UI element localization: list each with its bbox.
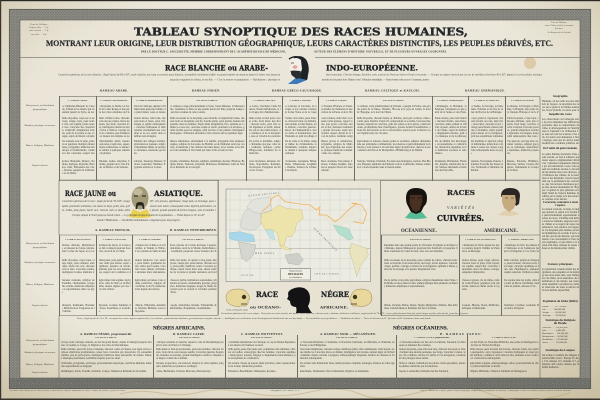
column: melanesian: UNE SEULE FAMILLE. [336, 337, 358, 339]
intro text right: marché sur les points hors l'Indus et ses Civilisation immédiate. — Nous livrons cette race en 3 rameaux, savoir : [322, 78, 430, 82]
column: arab 1: Arabes, Bédouins, Maures, Numides, Kabyles, Abyssins, Berbères, Juifs, Éthiopiens des côtes, Syriens, peuples de la Barbarie et de Nubie. [62, 160, 94, 175]
panel: table of the yellow race [24, 234, 218, 316]
branch labels: RAMEAU SYRIEN. [192, 88, 220, 92]
foot text: Sud de l'Hindoustan. — Sensibilité multitudinaire, rangement pour tout progrès. [97, 218, 180, 222]
column: melanesian: Australiens, Tasmaniens, Néo-Calédoniens, Négritos et Andamans. [300, 370, 369, 372]
map labels: MER INDES [255, 252, 275, 255]
column: papou 2: Fidjiens, Hébridais, Vitiens et habitants de Madagascar. [470, 370, 527, 372]
column: mongol 3: Chinois, Thibétains, Annamites, Siamois, Birmans, Laos et Pégouans. [134, 304, 166, 312]
skull right [349, 289, 372, 307]
column: american 2: Péruviens, Caraïbes, Guaranis, Botocudos, Patagons. [504, 304, 539, 310]
column: arab 2: Nubiens, Gallas, Abyssins, Somalis, peuples de la côte d'Ajan, de Berber et du Sennaar. [98, 160, 130, 169]
column: mongol 3: 3° FAMILLE CHINOISE. [139, 239, 161, 241]
column: oceanian: Vie de pêche et de petite agriculture, religion musulmane dans l'Inde, fétichisme et tabou dans les îles, anthropophagie dans plusieurs archipels; médecine empirique et superstitieuse. [384, 279, 458, 288]
heading: negres africains: NÉGRES AFRICAINS. [153, 324, 206, 332]
column: mongol 3 [132, 235, 167, 316]
heading: asiatique: ASIATIQUE. [153, 189, 203, 198]
title block [46, 26, 553, 54]
column: germanic 1: Vie de famille très développée, protestantisme et catholicisme, instruction répandue, écoles médicales savantes et renommées. [434, 140, 466, 155]
sidebar: unity: De l'unité du genre humain. [543, 146, 578, 150]
heading: negres oceaniens: NÉGRES OCÉANIENS. [393, 324, 449, 332]
map labels: ANTARCTIQUE [314, 273, 340, 276]
branch labels: B. RAMEAU CAFRE. [173, 332, 205, 336]
column: cafre: Pasteurs et guerriers, circoncision, absence de culte régulier, jongleurs, médecine par plantes et sortilèges. [156, 362, 224, 368]
column: arab 2 [96, 96, 131, 181]
labels: OCÉANIENNE. [401, 228, 438, 233]
panel: race blanche heading [20, 56, 580, 92]
foot text [72, 214, 205, 222]
branch labels: RAMEAU GERMANIQUE. [465, 88, 505, 92]
author line left: PAR LE DOCTEUR C. SAUCEROTTE, MEMBRE CORRESPONDANT DE L'ACADÉMIE ROYALE DE MÉDECINE, [141, 50, 286, 54]
sidebar: religions table: Statistique des Religions [545, 318, 576, 322]
column: cafre: Cafres, Béchuanas, Zoulous, Macouas, Monomotapa. [156, 370, 211, 372]
heading: races: RACES [447, 189, 475, 197]
column: hyperborean: Chasse et pêche, habitations souterraines, vêtements de peaux, chamanisme grossier, jongleries, médecine magique, usage de l'huile de poisson pour se nourrir et s'éclairer pendant l'hiver. [170, 279, 216, 294]
portrait: american [498, 188, 520, 216]
column: american 1 [459, 235, 501, 316]
column: american 1: L'Amérique du Nord, depuis les terres polaires jusqu'à l'isthme de Panama et au Mexique. [462, 244, 500, 252]
intro text right: bien tranchant, Chevron frange, flexibles, soin, surtout du Nord au Sud-est Fond et en pente. — Occupe un espace mesuré par un arc de méridien d'environ 40 à 60°, depuis le cercle polaire arctique [326, 74, 543, 76]
column: papou 2 [467, 335, 540, 378]
column: celtic: Ce rameau, venu primitivement de l'Orient, a peuplé la France, une grande partie de la Suisse, l'Irlande, l'Écosse et le pays de Galles, le nord de l'Espagne, et le nord de l'Italie. [356, 104, 430, 114]
panel: table of the copper races [381, 234, 540, 316]
column: hottentot: Taille petite, peau d'un jaune sale, pommettes très saillantes, cheveux en touffes, stéatopygie chez les femmes. Caractère apathique, malpropreté, paresse, langage à claquements extraordinaires, peu susceptibles de civilisation. [228, 348, 296, 360]
column: melanesian [297, 335, 396, 378]
column: germanic 2: Vie maritime et agricole, religion luthérienne, instruction commune à toutes les classes, longévité remarquable dans ces pays. [470, 140, 503, 155]
column: negre: Fétichisme, polygamie, esclavage, gouvernement despotique, sacrifices humains, médecine superstitieuse et magique. [60, 362, 152, 368]
column: negre [60, 337, 152, 372]
column: germanic 1 [432, 96, 468, 181]
column: syrian: Taille au-dessus de la moyenne, peau blanche ou légèrement brune, cheveux noirs et abondants, nez fin, bouche petite, yeux grands, beauté remarquable chez les femmes. Esprit délié, imagination vive, aptitude au commerce et aux arts, caractère souple et adroit, penchant à la mollesse, grande facilité pour les langues, goût du luxe et des plaisirs, intelligence développée, civilisation ancienne et très avancée dès les premiers âges. [170, 117, 244, 135]
column: mongol 2 [96, 235, 132, 316]
corner note: left: Papier vélin . . . 2 fr. [29, 26, 49, 29]
column: syrian: Syriens, Chaldéens, Persans, Afghans, Arméniens, Kurdes, Hindous, Bengalis, Parsis, Tamouls, Cingalais, Malabares, Bohémiens, Juifs de l'Orient et habitants de la Géorgie. [170, 160, 244, 169]
row labels: Haut pouvoir, et distribution géographique. [26, 104, 54, 111]
column: germanic 2: La Suède, la Norvège, le Danemark, l'Islande et les îles de la mer du Nord et de la Baltique. [470, 104, 503, 114]
column: arab 2: Christianisme altéré, mœurs pastorales et agricoles, superstitions nombreuses, la médecine réduite à quelques remèdes de plantes. [98, 140, 130, 155]
panel: right sidebar notes: Le genre humain descend-il d'une seule souche, ou faut-il admettre plusieurs espèces originairement distinctes ? Question longuement débattue par les naturalistes. Ceux-ci invoquent les traditions sacrées, la fécondité des unions entre races diverses, et l'influence des climats, de la nourriture et des habitudes; ceux-là répondent par la permanence des caractères, que l'on retrouve identiques sur les plus anciens monuments de l'Égypte. L'opinion la plus générale reconnaît l'unité de l'espèce humaine, modifiée par le temps et le lieu selon les contrées et les siècles. [542, 153, 579, 201]
column: syrian [167, 96, 246, 181]
column: american 2: Vie errante dans les forêts, culte du soleil au Pérou, fétichisme, médecine de plantes, adresse à l'arc. [504, 279, 539, 288]
column: american 1: Iroquois, Hurons, Sioux, Mohicans, Aztèques et Mexicains. [462, 304, 500, 310]
column: american 1: Chasse et guerre, vie de tribus, culte du Grand Esprit, jongleurs pour médecins, danses et chants sacrés à la guerre. [462, 279, 500, 291]
column: greco 3: 3° FAMILLE TURQUE. [326, 100, 347, 102]
continents [229, 197, 368, 277]
column: greco 1: Vie active et maritime, religion chrétienne grecque, culte des traditions antiques, patrie d'Hippocrate, fondateur de la médecine. [248, 140, 280, 155]
column: germanic 3: Russes, Polonais, Bohêmes, Moraves, Serbes, Croates, Bulgares, Lithuaniens et Cosaques du Don. [507, 160, 538, 172]
column: papou 2: Les îles Fidji, les Nouvelles-Hébrides, une partie de Madagascar et les îles de l'Océan Pacifique. [470, 341, 538, 347]
intro text right [322, 74, 543, 82]
column: papou 1: Pêche et culture, habitations sur pilotis, idoles grossières, parure de plumes, médecine par incantations. [398, 362, 466, 368]
branch labels: C. RAMEAU HOTTENTOT. [241, 332, 283, 336]
column: hottentot [225, 335, 297, 378]
skull caption: Crâne de Malgache adulte [226, 308, 248, 312]
row labels: Mœurs, Religion, Médecine. [26, 144, 54, 147]
row labels: Manifest. physiques et moraux. [24, 261, 56, 264]
portrait: yellow race [129, 186, 151, 218]
sidebar: languages: Statistique des Langues. [546, 348, 575, 352]
subtitle: MONTRANT LEUR ORIGINE, LEUR DISTRIBUTION GÉOGRAPHIQUE, LEURS CARACTÈRES DISTINCTIFS, LES PEUPLES DÉRIVÉS, ETC. [46, 38, 553, 48]
row labels [24, 104, 56, 167]
panel: race jaune [58, 180, 218, 235]
column: germanic 2: Suédois, Norvégiens, Danois, Islandais, Ecossais des basses terres, Normands et habitants du Jutland. [470, 160, 503, 172]
row labels: Haut pouvoir, et distribution géographique. [26, 242, 54, 249]
column: mongol 1: Pasteurs nomades, religion de Bouddha, chamanisme, polygamie tolérée, médecine empirique et superstitieuse dans ces pays. [62, 279, 94, 294]
column: germanic 3: 3° FAMILLE SLAVONNE. [511, 100, 534, 102]
main title: TABLEAU SYNOPTIQUE DES RACES HUMAINES, [134, 26, 468, 38]
column: melanesian: Peau noire fuligineuse, cheveux crépus, membres grêles, tête volumineuse, front fuyant, stature médiocre. Caractère féroce et défiant, intelligence très bornée, dernier degré de l'échelle humaine d'après certains voyageurs, anthropophagie fréquente, instinct de chasseur et d'imitation remarquable. [300, 348, 394, 360]
column: cafre: L'Afrique orientale et australe, depuis la côte de Mozambique jusqu'à la terre de Natal et à l'Orange. [156, 341, 224, 347]
column: oceanian: Répandue dans une grande partie de l'Océanie, Polynésie et Archipel de Malaisie, depuis Madagascar jusqu'aux îles Sandwich et jusqu'aux limites orientales de la mer du Sud, cette race est maritime. [384, 244, 458, 252]
panel: right sidebar notes: La station verticale, la main, le langage articulé, la raison et la faculté de perfectionnement appartiennent à toutes les races. L'homme seul habite toutes les latitudes, supporte tous les climats et se nourrit de toutes les substances. Son enfance est longue, sa vie moyenne plus étendue qu'aucun mammifère de sa taille; il est le seul être qui ait une histoire, qui transmette à ses descendants le fruit de son expérience, et qui s'élève à la notion d'un Dieu créateur de toutes choses et du monde entier visible. [542, 208, 579, 250]
row labels [24, 339, 56, 374]
table rules [381, 234, 540, 316]
column: oceanian [381, 235, 459, 316]
column: syrian: Ce rameau occupe principalement la Syrie, l'Asie Mineure, la Mésopotamie, l'Arménie, la Perse et une grande partie de l'Inde, jusqu'au Gange et aux îles voisines de cette contrée. [170, 104, 244, 114]
branch labels: A. RAMEAU MONGOL. [95, 228, 131, 232]
orange boundary [262, 195, 367, 223]
column: arab 1 [59, 96, 96, 181]
portrait: oceanian [405, 188, 427, 219]
column: papou 1 [396, 335, 467, 378]
characteristics strip: Noirs, Angle facial de 75 à 78°, occupant les vastes régions équatoriales, les chaleurs, généralement indolents, grossièrement assujettis, abrutis — Intelligence en civilisation et au développement intellectuel une arrière étude. — Les modalités en propriétaires. — Habitants du même. — Nous la divisons en II. Africains et III. Océaniens dans cette étude. [77, 316, 431, 320]
column: oceanian: Taille au-dessus de la moyenne, peau couleur de cuivre, cheveux noirs lisses ou bouclés, front assez étroit, nez large, lèvres épaisses. Caractère léger, perfide, courage et amour de la navigation, aptitude à imiter, goût pour le tatouage et la parure, imagination vive. [384, 258, 458, 270]
intro text left: Caractères généraux de la race blanche : Angle facial de 80 à 90°, ovale régulier, nez long et arrondi, peau blanche, susceptible seulement d'offrir un grand nombre de nuances depuis le blanc rosé jusqu'au [58, 74, 281, 76]
column: cafre: UNE SEULE FAMILLE. [179, 337, 200, 339]
column: papou 1: Stature moyenne, peau d'un noir sale, cheveux très épais et frisés formant une énorme perruque, nez large. Caractère curieux, léger, vif et défiant, adroits à la pêche et à la navigation, construisant des pirogues assez belles. [398, 348, 466, 360]
column: greco 3 [318, 96, 354, 181]
column: cafre: Taille haute et bien proportionnée, peau gris-noirâtre, cheveux laineux, front élevé, nez presque aquilin. Caractère guerrier, hospitalité, nomades et pasteurs, grande intelligence relative comparée aux nègres voisins du continent. [156, 348, 224, 360]
column: papou 1: La Nouvelle-Guinée, les îles de la Louisiade, Salomon, les Moluques et plusieurs îles voisines. [398, 341, 466, 347]
map labels: OCÉAN ARCTIQUE [248, 191, 280, 198]
sidebar: geography: Géographie. [553, 94, 568, 98]
column: greco 2 [282, 96, 318, 181]
column: arab 3: Habitent des villages fortifiés, agriculteurs et pasteurs, religion musulmane mêlée de pratiques anciennes, médecine grossière. [134, 140, 166, 155]
column: greco 3: Turcs ottomans, Turcomans, Tartares, Usbeks, Kirghiz, Iakoutes et peuples divers de l'Asie centrale. [320, 160, 352, 172]
column: greco 3: Mœurs graves et sédentaires, polygamie, religion de Mahomet, peu d'aptitude aux sciences, pratique médicale routinière dans ces contrées. [320, 140, 352, 155]
row labels: Manifest. physiques et moraux. [24, 351, 56, 354]
panel: right sidebar notes: Europe . . . . . 227,700,000 Asie . . . . . . 390,000,000 Afrique . . . . . 60,000,000 Amérique . . . 39,000,000 [542, 306, 566, 317]
portrait: white race [288, 56, 309, 84]
corner note: right: Au Bureau de la Société [547, 31, 570, 34]
footer imprint right: Tous les Tableaux de ce genre, publiés depuis longtemps, comprennent les principales découvertes, l'ethnographie et tous les résultats les plus récents de la science moderne. [420, 390, 571, 392]
column: papou 1: 1° FAMILLE PAPOUE, proprement dite. [414, 337, 450, 339]
table rules [59, 234, 218, 316]
skull left [226, 289, 250, 307]
branch labels: B. RAMEAU PAPOU. [440, 332, 482, 336]
column: greco 1 [246, 96, 282, 181]
column: american 1: Stature élevée, peau rouge cuivrée, cheveux noirs et plats, front fuyant, nez aquilin, regard fier. Caractère impassible, ruse à la chasse, courage, vengeance implacable. [462, 258, 500, 274]
sidebar: population table: Population du Globe (Balbi). [543, 299, 578, 303]
footer imprint center: Lithographie, Rue Cassette, N° 9. [270, 390, 300, 392]
corner note: right: Prix du Tableau, [551, 21, 567, 24]
column: arab 1: 1° FAMILLE ARABE. [68, 100, 88, 102]
column: american 2: 2° FAMILLE AMÉRICAINE. [508, 239, 534, 241]
column: celtic: Taille moyenne, cheveux bruns ou châtains, yeux gris ou bleus, crâne arrondi, peau blanche. Esprit vif, entreprenant et sociable, bravoure impétueuse, légèreté de caractère, goût des armes et de la gloire, vanité nationale, promptitude dans l'intelligence, grande facilité d'assimilation, amour des découvertes et de la conversation, passion pour la liberté et pour l'égalité entre les citoyens. [356, 117, 430, 135]
column: hottentot: Vie errante, chasse au poison, hutte portative, culte à peine ébauché de la lune, médecine grossière. [228, 362, 296, 368]
column: greco 2: Circassiens, Géorgiens, Mingréliens, Tcherkesses, Lesghiens, Ossètes, Tartares de Crimée et de Kasan. [284, 160, 316, 172]
column: arab 3: 3° FAMILLE BERBÉRIENNE. [136, 100, 163, 102]
footer imprint left: Se trouve chez l'auteur, rue de Seine, à Paris, et chez tous les libraires. Imprimerie de Fain et Thunot, rue Racine, 28, près de l'Odéon. [10, 390, 125, 392]
map of the world [226, 188, 371, 282]
panel: right sidebar notes: Chrétiens . . . . 260,000,000 Juifs . . . . . . . . 4,000,000 Musulmans . . . 120,000,000 Brahmanistes . . 60,000,000 Bouddhistes . . 170,000,000 Autres . . . . . . 123,000,000 [542, 327, 568, 344]
corner note: left: sur toile . . . 6 fr. [31, 33, 47, 36]
column: celtic: Français, Wallons, Irlandais, Écossais des montagnes, Gallois, Bas-Bretons, Basques, habitants du Piémont et de la Lombardie, Suisses romands et colons répandus dans le monde entier. [356, 160, 430, 169]
branch labels: RAMEAU CELTIQUE et KAULOIS. [365, 88, 420, 92]
column: negre: UNE SEULE FAMILLE. [95, 337, 117, 339]
branch labels [80, 331, 482, 336]
row labels: Haut pouvoir, et distribution géographique. [26, 339, 54, 346]
column: greco 1: 1° FAMILLE GRECQUE. [253, 100, 276, 102]
table rules [60, 96, 540, 180]
row labels: Peuples dérivés. [32, 164, 48, 167]
column: arab 3: Stature élevée, teint brun, cheveux noirs et lisses, yeux vifs, énergie et agilité remarquables, caractère belliqueux et indépendant, attachement aux coutumes et au sol, esprit rude et méfiant aux étrangers. [134, 117, 166, 138]
heading: race: RACE [256, 290, 278, 299]
column: hyperborean [167, 235, 218, 316]
panel: right sidebar notes [542, 94, 579, 369]
corner note: right: 6 francs. [555, 27, 563, 30]
column: arab 3: Kabyles, Touaregs, Maures, Tibbous, Guanches, Numides, Égyptiens anciens et Coptes. [134, 160, 166, 169]
column: mongol 2: Archipel du Japon, la Corée et les îles voisines jusqu'aux Kouriles, au nord de la Chine. [98, 244, 130, 252]
silhouette [287, 287, 312, 313]
column: arab 3 [131, 96, 167, 181]
panel: negres africains and oceaniens [24, 316, 540, 378]
panel: race cuivree [381, 180, 540, 235]
column: germanic 2: 2° FAMILLE SCANDINAVE. [474, 100, 500, 102]
heading: cuivrees: CUIVRÉES. [437, 213, 484, 223]
column: oceanian: Malais, Javanais, Battas, Dayas, Tagals, Malgaches, Taïtiens, Néo-Zélandais, Sandwichiens et habitants des îles Carolines. [384, 304, 458, 310]
column: cafre [153, 335, 225, 378]
column: melanesian: Vie errante sans habitations fixes, nudité presque complète, tatouages, absence de culte apparent. [300, 362, 394, 368]
branch labels: RAMEAU GRÉCO-CAUCASIQUE. [272, 88, 322, 92]
column: celtic: Agriculteurs et artisans, mœurs polies et sociables, religion chrétienne dans ses principales communions; les sciences et particulièrement la médecine y sont portées à un très haut degré de perfection, dans les écoles célèbres de Paris et de Montpellier, d'Édimbourg et de Dublin. [356, 140, 430, 152]
heading: race blanche: RACE BLANCHE ou ARABE- [165, 64, 268, 72]
column: celtic: UNE SEULE FAMILLE. [383, 100, 404, 102]
panel: right sidebar notes: On évalue le nombre des langues à environ 860, savoir : Europe 53, Asie 153, Afrique 115, Océanie 117, Amérique 422, toutes classées par familles distinctes. [542, 354, 579, 369]
column: syrian: Mœurs sédentaires, attachement à la famille, polygamie chez plusieurs peuples, religion de Zoroastre, de Brahma ou de Mahomet selon les contrées; la médecine y fut cultivée de bonne heure, et les Arabes et les Perses l'ont transmise à l'Occident par leurs écrits et leurs écoles. [170, 140, 244, 152]
column: american 1: 1° FAMILLE SEPTENTRIONALE. [465, 239, 496, 241]
column: mongol 1: Mongols, Kalmouks, Bouriates, Mantchoux et Tongouses de la Sibérie. [62, 304, 94, 312]
heading: varietes: VARIÉTÉS [447, 205, 474, 210]
column: mongol 3: Agriculture parvenue à une grande perfection, religion de Confucius et de Fô, médecine écrite depuis des siècles. [134, 279, 166, 291]
column: syrian: UNE SEULE FAMILLE. [196, 100, 218, 102]
sidebar: religions table: du Monde. [554, 321, 567, 325]
corner note: left: avec colorié . . . 3 fr. [29, 29, 49, 32]
column: oceanian: UNE SEULE FAMILLE. [410, 239, 431, 241]
column: papou 2: Agriculture soignée, anthropophagie, tabou, gouvernement de chefs, prêtres médecins et devins. [470, 362, 538, 368]
column: hottentot: UNE SEULE FAMILLE. [251, 337, 272, 339]
map labels: OCÉAN PACIFIQUE [313, 227, 338, 252]
branch labels: A. RAMEAU NÈGRE, proprement dit. [80, 331, 132, 336]
intro text left [58, 74, 281, 82]
corner note: right: avec l'Atlas colorié et marqué [545, 24, 573, 27]
map labels [242, 191, 340, 277]
column: germanic 1: Allemands, Hollandais, Flamands, Anglais, Américains du nord, Suisses allemands et habitants des Pays-Bas. [434, 160, 466, 172]
column: greco 1: Grecs modernes, Albanais, Siciliens, Napolitains, Romains, Provençaux, Espagnols du littoral et Corses. [248, 160, 280, 172]
row labels: Peuples dérivés. [32, 304, 48, 307]
foot text: Occupe, depuis le Nord jusqu'au Sud de l'Asie. — Le principal occupe la moitié de la population. — Tribut depuis le 16° au 40° [72, 214, 205, 217]
column: hyperborean: UNE SEULE FAMILLE. [182, 239, 204, 241]
column: greco 2: Vie de clans et de tribus, religion mêlée de christianisme et d'islamisme, vendetta, médecine réduite à quelques simples pratiques. [284, 140, 316, 155]
column: germanic 3: Vie agricole, servage dans certaines contrées, religion grecque ou catholique, superstitions répandues, médecine populaire. [507, 140, 538, 155]
column: negre: Occupe toute l'Afrique centrale, au sud du grand désert, depuis le Sénégal jusqu'au Sennaar, la Guinée, le Congo, la Nigritie et les côtes de Mozambique. [60, 341, 152, 347]
row labels [24, 242, 56, 307]
column: germanic 2 [468, 96, 504, 181]
map legend: de la distribution. [289, 277, 303, 279]
column: papou 2: Taille élevée, peau bronzée très foncée, cheveux frisés, nez aquilin quelquefois, corps vigoureux. Caractère belliqueux et cruel, grande habileté, commerce actif entre les îles, industrie assez avancée et construction remarquable. [470, 348, 538, 360]
row labels: Mœurs, Religion, Médecine. [26, 283, 54, 286]
characteristics strip: Caractères généraux de la race nègre : Peau plus ou moins foncée, nez épaté, lèvres épaisses, cheveux noirs, laineux, mâchoires saillantes, angle facial de 70 à 75°, corps généralement bien fait, pieds larges et plats, tête étroite, front bas et fuyant. [221, 312, 468, 315]
corner note: left [29, 23, 49, 36]
corner note: left: Pour les Collèges. [30, 23, 48, 26]
map labels: OCÉAN [242, 274, 254, 277]
column: papou 2: 2° FAMILLE MALGACHE. [492, 337, 516, 339]
column: papou 1: Papous, Louisiadais, habitants des îles Salomon. [398, 370, 449, 372]
column: hottentot: L'extrémité méridionale de l'Afrique, le cap de Bonne-Espérance et les déserts de l'intérieur au nord. [228, 341, 296, 347]
heading: race jaune: RACE JAUNE ou [65, 189, 116, 198]
column: greco 2: 2° FAMILLE TARTARE. [290, 100, 311, 102]
column: mongol 2: Japonais, Coréens, habitants de Iesso, Kouriliens, et Loutchou. [98, 304, 130, 312]
map legend [281, 269, 311, 280]
column: germanic 3 [504, 96, 540, 181]
map legend: Mappe Routière [288, 270, 302, 273]
row labels: Manifest. physiques et moraux. [24, 124, 56, 127]
column: mongol 2: 2° FAMILLE JAPONAISE. [103, 239, 126, 241]
heading: oceano: ou OCÉANO- [250, 304, 281, 310]
column: greco 1: La Grèce, l'Archipel, l'Asie Mineure, l'Italie méridionale, et les rivages de la Méditerranée. [248, 104, 280, 114]
heading: indo-europeenne: INDO-EUROPÉENNE. [326, 64, 418, 72]
column: melanesian: La Nouvelle-Hollande, la Tasmanie, la Nouvelle-Calédonie, les Hébrides, et l'intérieur de Bornéo et des Philippines. [300, 341, 394, 347]
column: negre: Taille variable, peau très noire et luisante, cheveux courts et laineux, nez épaté, lèvres épaisses, mâchoires proéminentes, odeur forte. Caractère gai, insouciant, vif, sensualité extrême, peu de prévoyance, intelligence médiocre mais susceptible de culture. Danse et musique passionnées, sensibilité exquise pour les siens. [60, 348, 152, 360]
column: germanic 1: 1° FAMILLE GERMANIQUE. [437, 100, 464, 102]
sidebar: inequality: Inégalité des races. [549, 112, 572, 116]
sidebar: main factors: Facteurs principaux. [548, 262, 573, 266]
column: arab 2: 2° FAMILLE ABYSSINIENNE. [100, 100, 128, 102]
panel: race cuivree: AMÉRICAINE. [483, 228, 519, 233]
column: hottentot: Hottentots, Boschimans, Namaquois, Koranas. [228, 370, 276, 372]
sidebar: causes: Caractères communs à toute l'espèce. [543, 200, 578, 207]
row labels: Mœurs, Religion, Médecine. [26, 363, 54, 366]
panel: right sidebar notes: La répartition actuelle résulte des migrations, des conquêtes et du mélange des races entre elles, sous l'influence du climat, de la nourriture, des institutions et des mœurs, qui concourent ensemble à produire les variétés observées sur toute la surface de la terre habitée aujourd'hui. [542, 268, 579, 292]
branch labels [100, 88, 505, 92]
branch labels: RAMEAU ARABE. [100, 88, 128, 92]
panel: race negre [218, 180, 381, 315]
characteristics strip [77, 312, 468, 320]
column: celtic [354, 96, 432, 181]
column: mongol 2: Agriculture très soignée, navigation, culte de Sinto et de Bouddha, mœurs réglées par des lois très sévères. [98, 279, 130, 291]
sidebar: religions table [545, 318, 576, 325]
corner note: right [544, 21, 574, 34]
column: mongol 1: 1° FAMILLE MANTCHOUE. [65, 239, 91, 241]
column: american 2 [501, 235, 540, 316]
panel: table of the white race [24, 96, 540, 181]
heading: africaine: AFRICAINE. [319, 304, 349, 310]
branch labels: A. RAMEAU NOIR — MÉLANÉSIEN. [320, 331, 376, 336]
column: mongol 1 [59, 235, 96, 316]
grid [226, 189, 370, 282]
intro text left: jusqu'au rougeâtre du climat, et mo-bile. — C'est la mesure en population. — Habitations : physique et [169, 78, 280, 82]
author line right: AUTEUR DES ÉLÉMENS D'HISTOIRE NATURELLE, ET DE PLUSIEURS OUVRAGES COURONNÉS. [314, 50, 447, 54]
map legend: DES RACES [288, 273, 304, 276]
panel: race jaune: B. RAMEAU HYPERBORÉEN. [170, 227, 217, 232]
heading: negre: NÉGRE [321, 290, 349, 299]
column: negre: Mandingues, Iolofs, Foulahs, Achantis, Congos, Nubiens et habitants de la Guinée. [60, 370, 147, 372]
column: hyperborean: Lapons, Samoïèdes, Ostiaks, Tchouktchis, Kamtchadales, Esquimaux, Groënlandais. [170, 304, 216, 310]
row labels: Peuples dérivés. [32, 371, 48, 374]
